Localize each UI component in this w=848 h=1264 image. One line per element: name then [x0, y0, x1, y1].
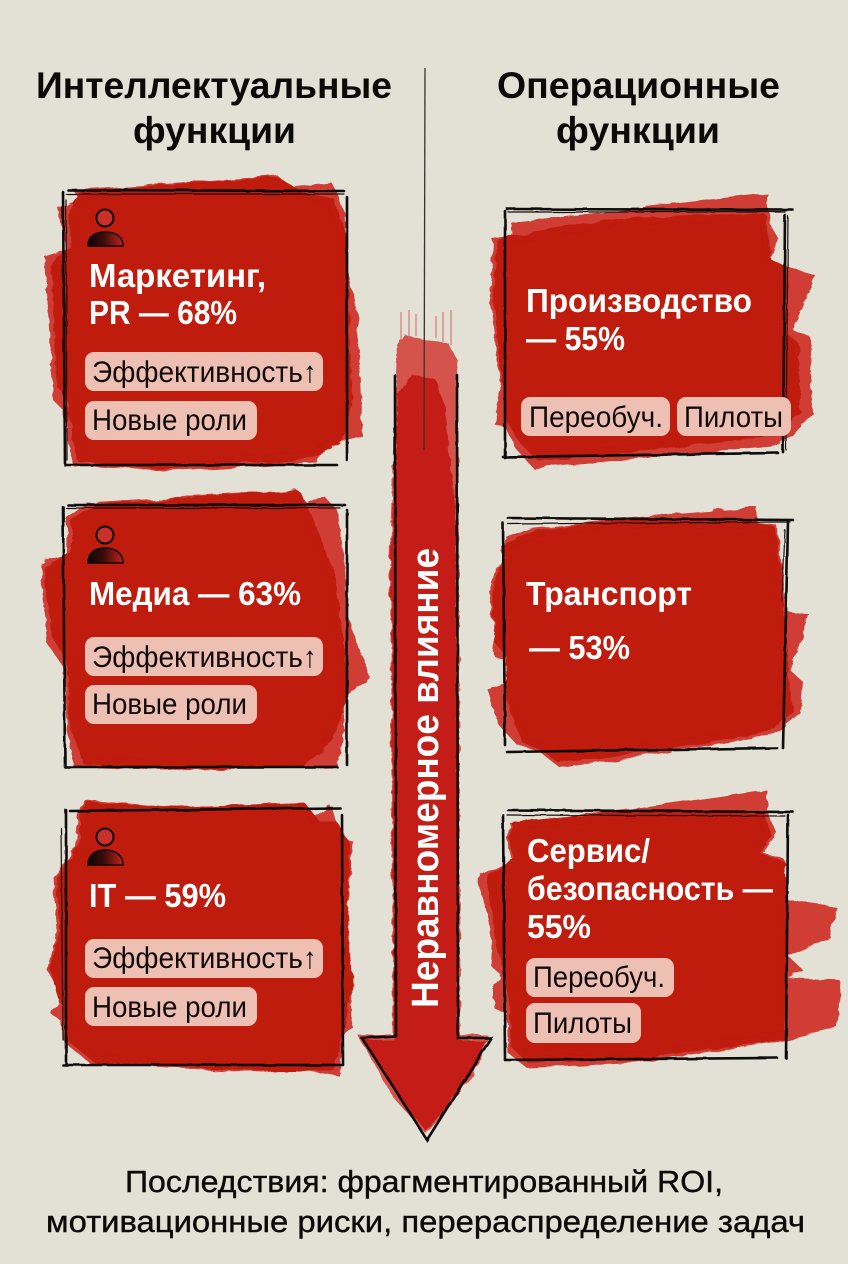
tag: efficiency: Эффективность↑ — [92, 356, 317, 389]
tag: efficiency: Эффективность↑ — [92, 641, 317, 674]
title: Медиа — 63% — [89, 575, 301, 612]
tag: pilots: Пилоты — [684, 401, 783, 434]
tag: new roles: Новые роли — [92, 991, 247, 1024]
heading: intellectual functions: функции — [133, 110, 296, 151]
heading: operational functions: функции — [556, 110, 720, 151]
center divider line — [424, 68, 425, 450]
heading: operational functions — [497, 65, 780, 151]
paint swatch — [490, 193, 815, 468]
title: Сервис/ — [527, 832, 650, 869]
panel: IT — [47, 800, 353, 1077]
paint swatch — [40, 490, 370, 770]
title: Производство — [526, 282, 752, 319]
tag: new roles: Новые роли — [92, 688, 247, 721]
panel: service and security — [477, 790, 840, 1068]
tag: new roles: Новые роли — [92, 404, 247, 437]
hand-drawn frame — [503, 518, 793, 752]
paint swatch — [45, 175, 363, 472]
footer: consequences: мотивационные риски, перераспределение задач — [46, 1204, 805, 1239]
hand-drawn frame — [61, 808, 343, 1065]
heading: intellectual functions — [36, 65, 392, 151]
hand-drawn frame — [503, 810, 793, 1060]
title: 55% — [527, 908, 591, 945]
tag: retraining: Переобуч. — [533, 961, 665, 994]
hand-drawn frame — [63, 505, 347, 767]
title: IT — 59% — [89, 877, 226, 914]
title: безопасность — — [527, 870, 773, 907]
title — [89, 257, 266, 331]
panel: media — [40, 490, 370, 770]
paint swatch — [47, 800, 353, 1077]
hand-drawn frame — [63, 190, 347, 465]
tag: pilots: Пилоты — [533, 1007, 632, 1040]
footer: consequences — [46, 1164, 805, 1239]
icon: person — [88, 526, 123, 563]
title — [526, 575, 692, 666]
tag: efficiency: Эффективность↑ — [92, 942, 317, 975]
tag: retraining: Переобуч. — [529, 401, 663, 434]
title: — 55% — [526, 320, 625, 357]
footer: consequences: Последствия: фрагментированный ROI, — [125, 1164, 723, 1199]
icon: person — [88, 210, 123, 246]
panel: transport — [488, 507, 810, 768]
panel: marketing — [45, 175, 363, 472]
panel: production — [490, 193, 815, 468]
heading: intellectual functions: Интеллектуальные — [36, 65, 392, 106]
arrow paint — [358, 334, 488, 1133]
arrow top dry-brush streaks — [401, 310, 451, 345]
title: PR — 68% — [89, 294, 237, 331]
title: Транспорт — [526, 575, 692, 612]
title: Маркетинг, — [89, 257, 266, 294]
paint swatch — [488, 507, 810, 768]
title — [526, 282, 752, 357]
icon: person — [88, 828, 123, 865]
arrow label: Неравномерное влияние — [405, 548, 447, 1008]
arrow: uneven impact — [358, 310, 491, 1140]
paint swatch — [477, 790, 840, 1068]
arrow outline — [362, 375, 491, 1140]
hand-drawn frame — [503, 209, 793, 458]
title — [527, 832, 773, 945]
title: — 53% — [529, 629, 630, 666]
heading: operational functions: Операционные — [497, 65, 780, 106]
